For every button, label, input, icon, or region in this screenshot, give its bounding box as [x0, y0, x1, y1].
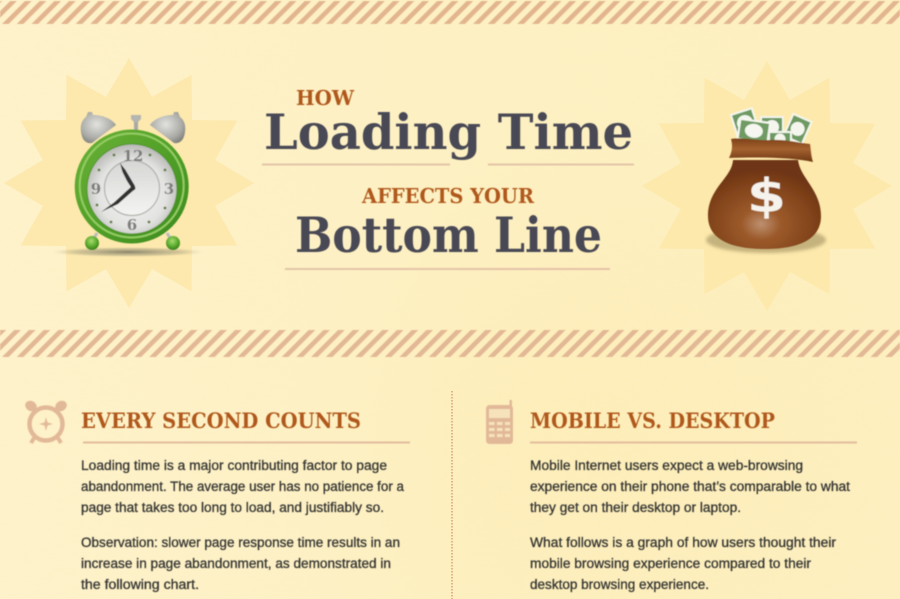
starburst behind money bag [642, 61, 892, 311]
clock numerals: 12 [123, 147, 143, 165]
paragraph one: abandonment. The average user has no patience for a [81, 479, 404, 494]
clock numerals: 9 [91, 180, 101, 198]
panel: every second counts [23, 399, 410, 592]
paragraph two: Observation: slower page response time results in an [81, 535, 400, 550]
clock face [88, 144, 176, 234]
title: how: HOW [296, 86, 355, 110]
title [262, 86, 634, 270]
panel: mobile vs desktop [486, 400, 857, 592]
title rule bottom [285, 268, 610, 270]
paragraph one: Loading time is a major contributing factor to page [81, 458, 387, 473]
clock shadow [52, 247, 204, 257]
column divider [451, 391, 453, 599]
clock bells [81, 112, 185, 143]
paragraph one: Mobile Internet users expect a web-browsing [530, 458, 803, 473]
heading rule [530, 442, 857, 444]
dollar sign: $ [747, 169, 786, 223]
paragraph two: desktop browsing experience. [530, 577, 709, 592]
paragraph two: What follows is a graph of how users thought their [530, 535, 837, 550]
paragraph two [530, 535, 837, 592]
icon: money bag [706, 107, 826, 253]
starburst behind clock [4, 58, 254, 308]
paragraph two: increase in page abandonment, as demonstrated in [81, 556, 391, 571]
paragraph two: the following chart. [81, 577, 199, 592]
title: loading time: Loading Time [264, 103, 633, 161]
bag body [708, 160, 821, 249]
clock tick dots [96, 154, 166, 223]
middle stripe band [0, 330, 900, 357]
clock body [75, 130, 189, 244]
paragraph one [530, 458, 850, 515]
paragraph one: they get on their desktop or laptop. [530, 500, 741, 515]
title rule left [262, 164, 450, 166]
clock feet [85, 233, 180, 250]
clock numerals [91, 147, 174, 234]
title: bottom line: Bottom Line [295, 206, 602, 264]
paragraph two [81, 535, 400, 592]
paragraph one [81, 458, 404, 515]
title: affects your: AFFECTS YOUR [361, 184, 535, 208]
icon: alarm clock [52, 112, 204, 257]
heading: MOBILE VS. DESKTOP [530, 409, 775, 434]
bag neck [729, 138, 813, 162]
heading: EVERY SECOND COUNTS [81, 409, 361, 434]
icon: mobile phone [486, 400, 513, 444]
bag shadow [706, 227, 826, 253]
clock numerals: 3 [164, 180, 174, 198]
paragraph one: page that takes too long to load, and justifiably so. [81, 500, 384, 515]
paragraph two: mobile browsing experience compared to their [530, 556, 812, 571]
clock hands [101, 163, 135, 212]
title rule right [488, 164, 634, 166]
clock numerals: 6 [127, 216, 137, 234]
paragraph one: experience on their phone that’s comparable to what [530, 479, 850, 494]
icon: small alarm clock [23, 399, 69, 443]
heading rule [83, 442, 410, 444]
banknotes [730, 107, 813, 145]
top stripe band [0, 1, 900, 24]
